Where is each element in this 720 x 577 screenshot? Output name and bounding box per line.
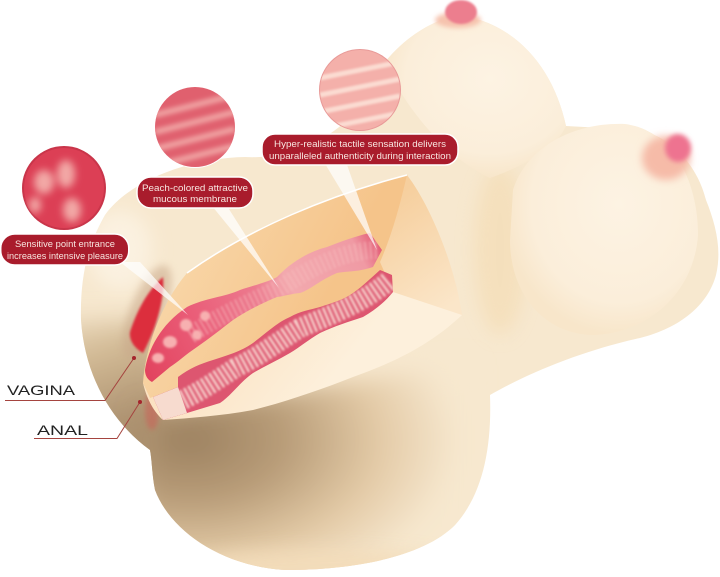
upper breast: [385, 18, 566, 178]
right breast nipple: [665, 134, 691, 162]
lower canal entrance: [153, 387, 187, 420]
cutaway section: [140, 175, 462, 425]
lower canal: [150, 265, 400, 425]
right breast: [510, 124, 698, 335]
callout: sensitive point: increases intensive pleasure: [7, 251, 123, 262]
callout: peach-colored: [137, 177, 253, 208]
cut: floor: [143, 280, 462, 420]
body shading: [81, 171, 524, 570]
cut: end wall: [380, 175, 462, 315]
callout: sensitive point: [1, 234, 129, 265]
upper canal nodules: [152, 311, 210, 363]
label: anal: ANAL: [37, 422, 88, 438]
external detail: [113, 259, 181, 430]
pointer beams: [120, 162, 377, 315]
label: anal: [34, 400, 142, 438]
upper canal ribs: [190, 250, 378, 335]
upper breast areola: [435, 12, 481, 28]
cut: white upper edge: [187, 175, 407, 273]
label: vagina: [5, 356, 136, 400]
cut: orange wall: [143, 175, 407, 398]
callout: hyper-realistic: unparalleled authenticity during interaction: [269, 151, 451, 162]
callout: hyper-realistic: [262, 134, 458, 165]
right breast areola: [642, 136, 690, 180]
callout: hyper-realistic: Hyper-realistic tactile sensation delivers: [274, 139, 446, 150]
inset circle: entrance: [22, 146, 106, 230]
callout: peach-colored: mucous membrane: [153, 194, 237, 205]
inset circle: membrane: [154, 86, 236, 168]
upper canal: [145, 233, 382, 382]
inset circle: texture: [319, 49, 401, 131]
label: vagina: VAGINA: [7, 382, 76, 398]
callout: peach-colored: Peach-colored attractive: [142, 183, 248, 194]
lower canal ribs: [165, 280, 390, 408]
upper breast nipple: [445, 0, 477, 24]
callout: sensitive point: Sensitive point entrance: [15, 239, 115, 250]
